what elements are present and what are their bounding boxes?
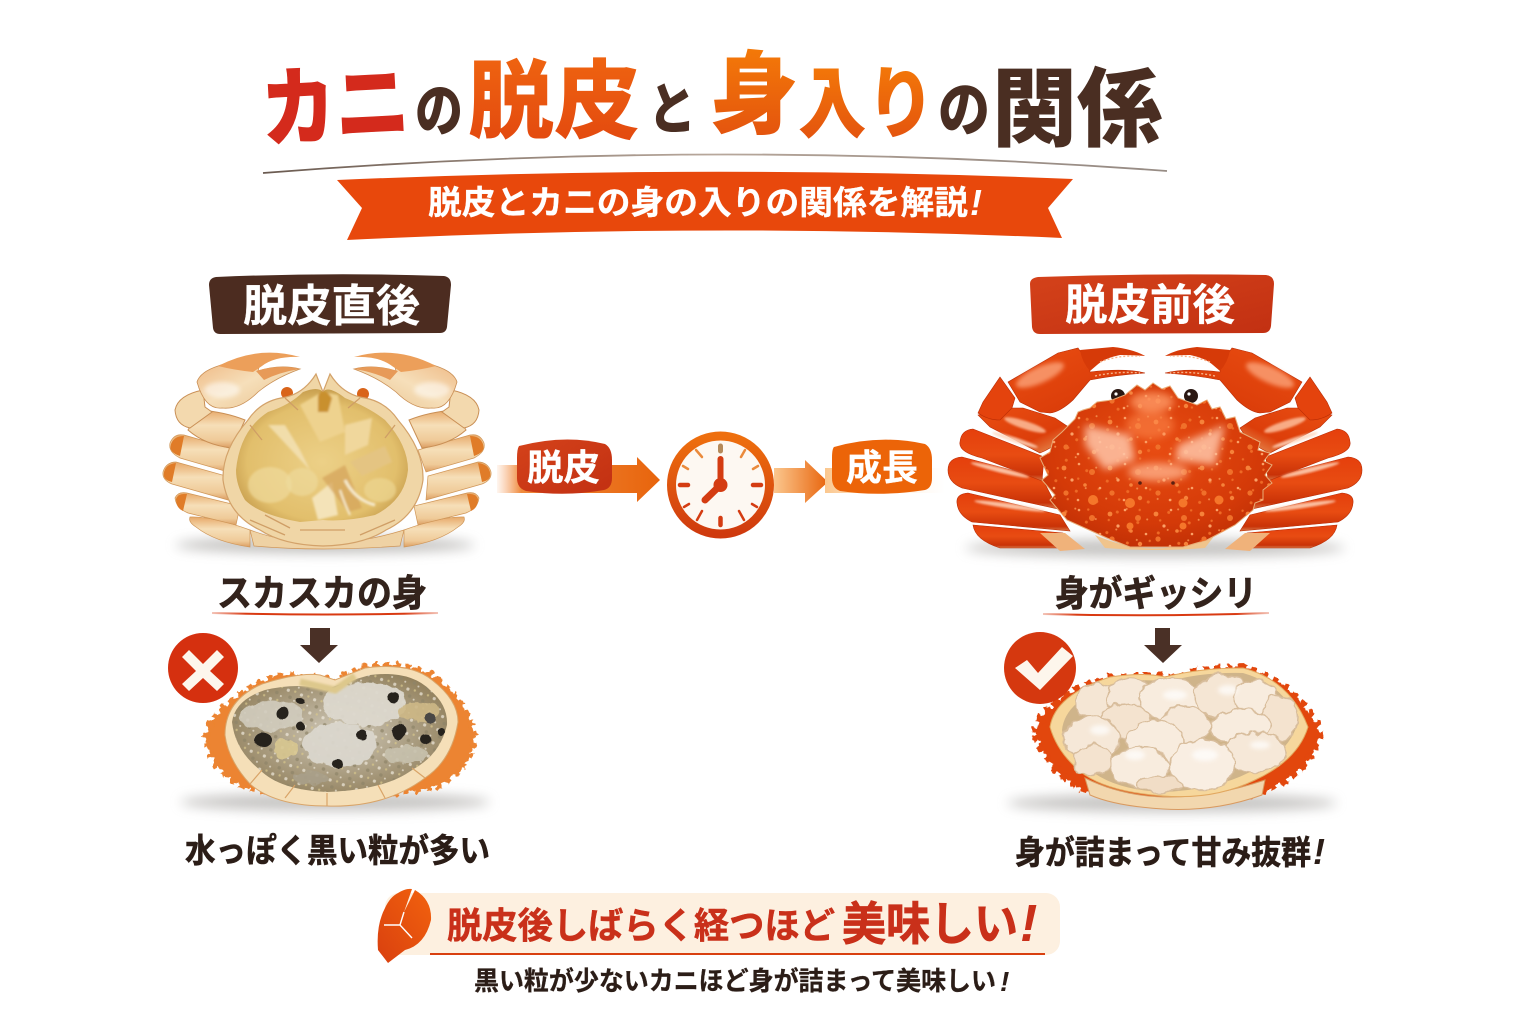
title: と [648,78,696,141]
arrow: growth: 成長 [846,447,918,488]
crab: pale, freshly molted [163,353,491,553]
badge: before molting: 脱皮前後 [1065,282,1235,330]
icon: check mark [1004,632,1076,704]
callout: conclusion [385,893,1060,955]
arrow: molting: 脱皮 [527,447,600,488]
closing note: 黒い粒が少ないカニほど身が詰まって美味しい [474,966,996,996]
caption: watery with many black grains: 水っぽく黒い粒が多い [185,832,490,869]
label: hollow meat: スカスカの身 [217,573,427,614]
title: の [938,77,990,144]
title: カニ [259,55,412,159]
title: 脱皮 [468,54,640,150]
title: 身 [710,46,798,146]
shell: watery meat with black grains [180,666,490,811]
callout: conclusion: 脱皮後しばらく経つほど [447,905,835,946]
caption: packed and sweet: ! [1313,831,1325,872]
crab: red, fully grown [948,347,1362,557]
title: 関係 [992,62,1162,158]
shell: packed white meat [1007,667,1337,812]
icon: cross mark [168,633,238,703]
label: packed meat: 身がギッシリ [1055,573,1257,614]
badge: before molting [1030,274,1274,334]
badge: just after molting [209,274,451,334]
arrow: down right [1144,628,1182,663]
subtitle banner: ! [970,182,982,223]
title: 入り [798,60,935,148]
subtitle banner [337,172,1073,240]
arrow: down left [300,628,338,663]
callout: conclusion: ! [1020,895,1037,953]
closing note: ! [1000,966,1009,997]
icon: clock [672,436,770,534]
arrow: growth [774,440,945,503]
title [259,46,1162,159]
icon: crab claw [378,889,431,963]
arrow: molting [497,439,660,502]
badge: just after molting: 脱皮直後 [243,282,420,331]
callout: conclusion: 美味しい [842,898,1018,950]
title: の [415,79,463,144]
subtitle banner: 脱皮とカニの身の入りの関係を解説 [428,184,968,221]
caption: packed and sweet: 身が詰まって甘み抜群 [1015,834,1311,871]
